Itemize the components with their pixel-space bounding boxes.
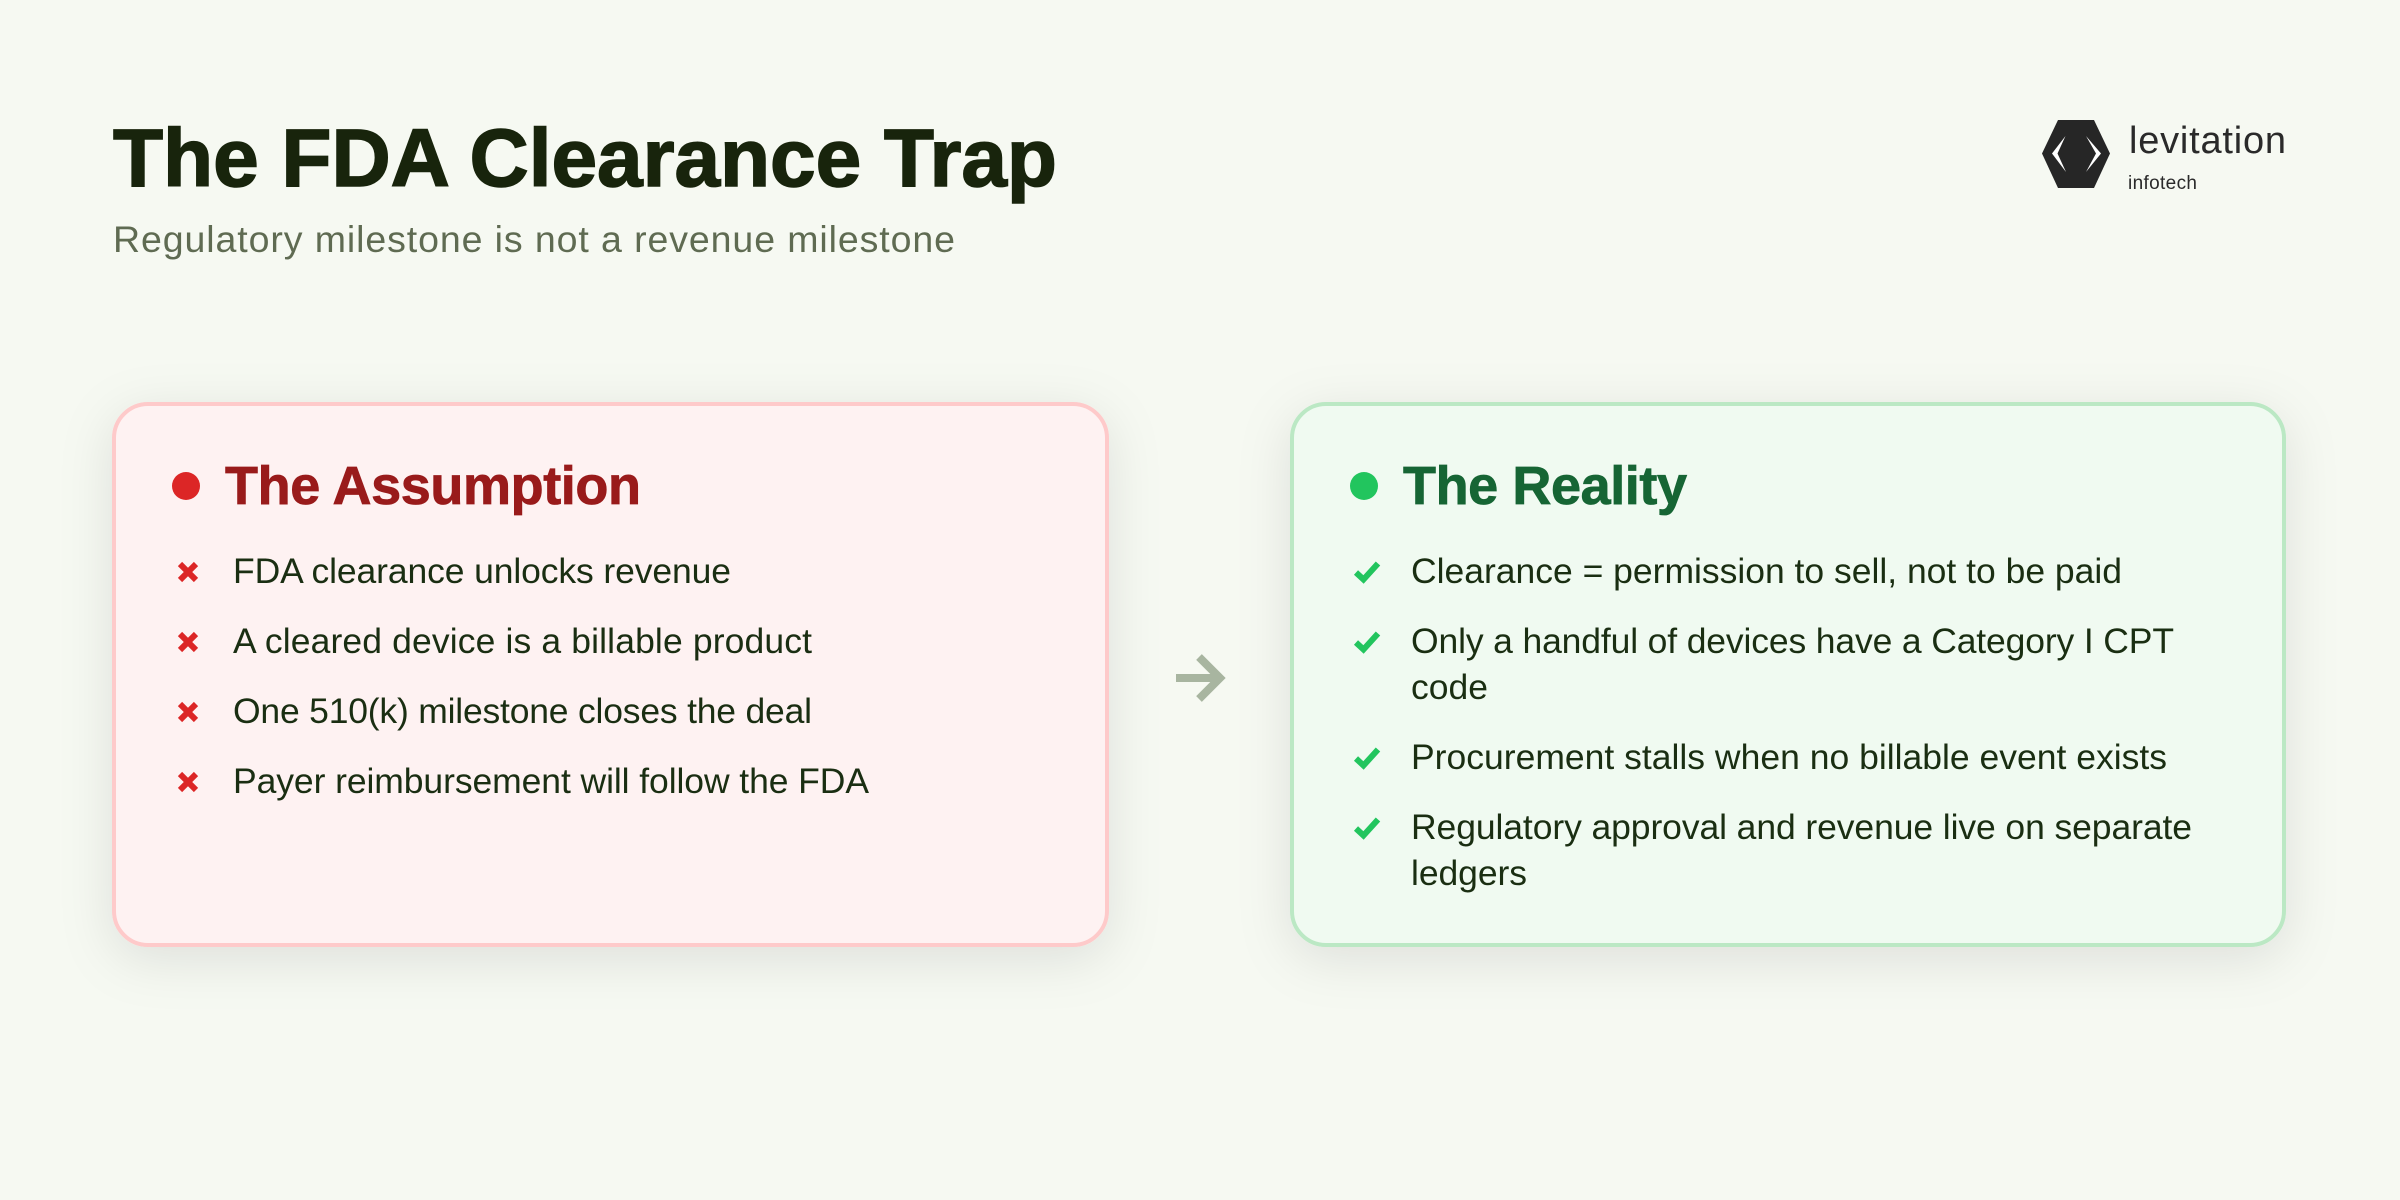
subtitle: Regulatory milestone is not a revenue milestone — [113, 218, 955, 260]
item 2: A cleared device is a billable product — [233, 621, 812, 661]
item 2: Only a handful of devices have a Category I CPT — [1411, 621, 2174, 661]
item 4: Payer reimbursement will follow the FDA — [233, 761, 869, 801]
item 4: ledgers — [1411, 853, 1527, 893]
item 2: code — [1411, 667, 1488, 707]
heading: The Assumption — [225, 456, 641, 516]
item 2 — [1356, 621, 2174, 707]
item 1: Clearance = permission to sell, not to be paid — [1411, 551, 2122, 591]
item 4 — [1356, 807, 2192, 893]
logo subtext: infotech — [2128, 173, 2197, 194]
status dot — [172, 472, 200, 500]
panel: the reality — [1292, 404, 2284, 945]
status dot — [1350, 472, 1378, 500]
item 3: One 510(k) milestone closes the deal — [233, 691, 812, 731]
item 4: Regulatory approval and revenue live on separate — [1411, 807, 2192, 847]
icon: hexagon logo mark — [2042, 120, 2110, 188]
panel background — [114, 404, 1107, 945]
logo: levitation infotech — [2042, 120, 2286, 194]
panel background — [1292, 404, 2284, 945]
item 3: Procurement stalls when no billable event exists — [1411, 737, 2167, 777]
heading: The Reality — [1403, 456, 1687, 516]
panel: the assumption — [114, 404, 1107, 945]
title: The FDA Clearance Trap — [113, 113, 1057, 204]
arrow — [1176, 657, 1220, 699]
logo wordmark: levitation — [2129, 120, 2286, 162]
item 1: FDA clearance unlocks revenue — [233, 551, 731, 591]
